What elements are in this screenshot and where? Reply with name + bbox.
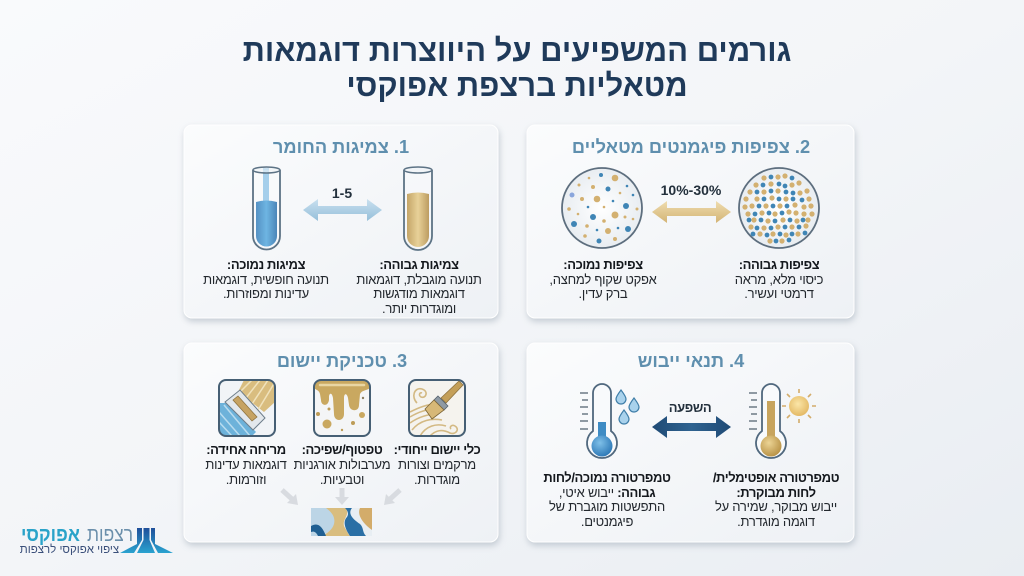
text: optimal temperature: דוגמה מוגדרת. [737,514,815,529]
text: low viscosity [203,257,329,301]
text: special tool: מוגדרות. [414,472,460,487]
text: optimal temperature [713,470,840,529]
label: 10%-30%: 10%-30% [661,182,722,198]
icon: optimal temperature thermometer and sun [749,384,816,458]
text: low temperature [543,470,671,529]
text: uniform spread: וזורמות. [226,472,266,487]
panel: 1 material viscosity [184,125,498,318]
icon: low density dish [562,168,642,248]
panel: 4 drying conditions [527,343,854,542]
arrow: viscosity range [303,199,382,221]
logo tagline: ציפוי אפוקסי לרצפות [20,543,119,556]
arrows: converge to result [282,488,400,505]
text: high density: דרמטי ועשיר. [744,286,814,301]
text: low density: צפיפות נמוכה: [563,257,643,272]
text: low density: אפקט שקוף למחצה, [549,272,657,287]
icon: low viscosity test tube [253,167,280,250]
text: drip and pour: וטבעיות. [320,472,364,487]
text: drip and pour: טפטוף/שפיכה: [302,442,383,457]
text: low density [549,257,657,301]
label: influence: השפעה [669,400,711,415]
title: גורמים המשפיעים על היווצרות דוגמאות [243,33,792,68]
text: low temperature: טמפרטורה נמוכה/לחות [543,470,671,485]
logo wordmark light: רצפות [87,524,133,546]
text: uniform spread [205,442,287,487]
image: metallic pattern result [311,508,372,536]
text: high viscosity: תנועה מוגבלת, דוגמאות [356,272,482,287]
text: optimal temperature: ייבוש מבוקר, שמירה על [715,499,837,514]
text: special tool [394,442,481,487]
text: low temperature: התפשטות מוגברת של [549,499,665,514]
text: high density: צפיפות גבוהה: [739,257,820,272]
text: special tool: כלי יישום ייחודי: [394,442,481,457]
heading: viscosity: 1. צמיגות החומר [273,137,409,157]
heading: drying: 4. תנאי ייבוש [638,351,745,371]
text: high density [735,257,824,301]
text: optimal temperature: טמפרטורה אופטימלית/ [713,470,840,485]
text: high viscosity: צמיגות גבוהה: [379,257,459,272]
arrow: density range [652,201,731,223]
text: low viscosity: תנועה חופשית, דוגמאות [203,272,329,287]
icon: high density dish [739,168,819,248]
heading: pigment density: 2. צפיפות פיגמנטים מטאליים [572,137,810,157]
text: drip and pour [294,442,390,487]
text: uniform spread: דוגמאות עדינות [205,457,287,472]
text: low temperature: פיגמנטים. [581,514,633,529]
logo wordmark bold: אפוקסי [21,524,80,546]
text: low density: ברק עדין. [579,286,628,301]
icon: high viscosity test tube [404,167,432,250]
text: high density: כיסוי מלא, מראה [735,272,824,287]
title [243,33,792,103]
icon: trowel [219,380,275,436]
icon: low temperature thermometer and drops [580,384,639,458]
text: high viscosity [356,257,482,316]
panel: 2 pigment density [527,125,854,318]
text: optimal temperature: לחות מבוקרת: [736,485,816,500]
heading: technique: 3. טכניקת יישום [277,351,407,371]
logo [20,524,173,556]
title: מטאליות ברצפת אפוקסי [346,68,688,103]
text: low viscosity: עדינות ומפוזרות. [223,286,309,301]
text: low temperature: גבוהה: ייבוש איטי, [559,485,655,500]
logo mark [120,528,173,553]
arrow: influence [652,416,731,438]
text: special tool: מרקמים וצורות [398,457,476,472]
text: uniform spread: מריחה אחידה: [206,442,286,457]
text: high viscosity: ומוגדרות יותר. [382,301,456,316]
label: 1-5: 1-5 [332,185,352,201]
panel: 3 application technique [184,343,498,542]
text: high viscosity: דוגמאות מודגשות [373,286,465,301]
text: low viscosity: צמיגות נמוכה: [227,257,306,272]
icon: drip and pour [314,380,370,436]
text: drip and pour: מערבולות אורגניות [294,457,390,472]
icon: brush [409,380,465,436]
